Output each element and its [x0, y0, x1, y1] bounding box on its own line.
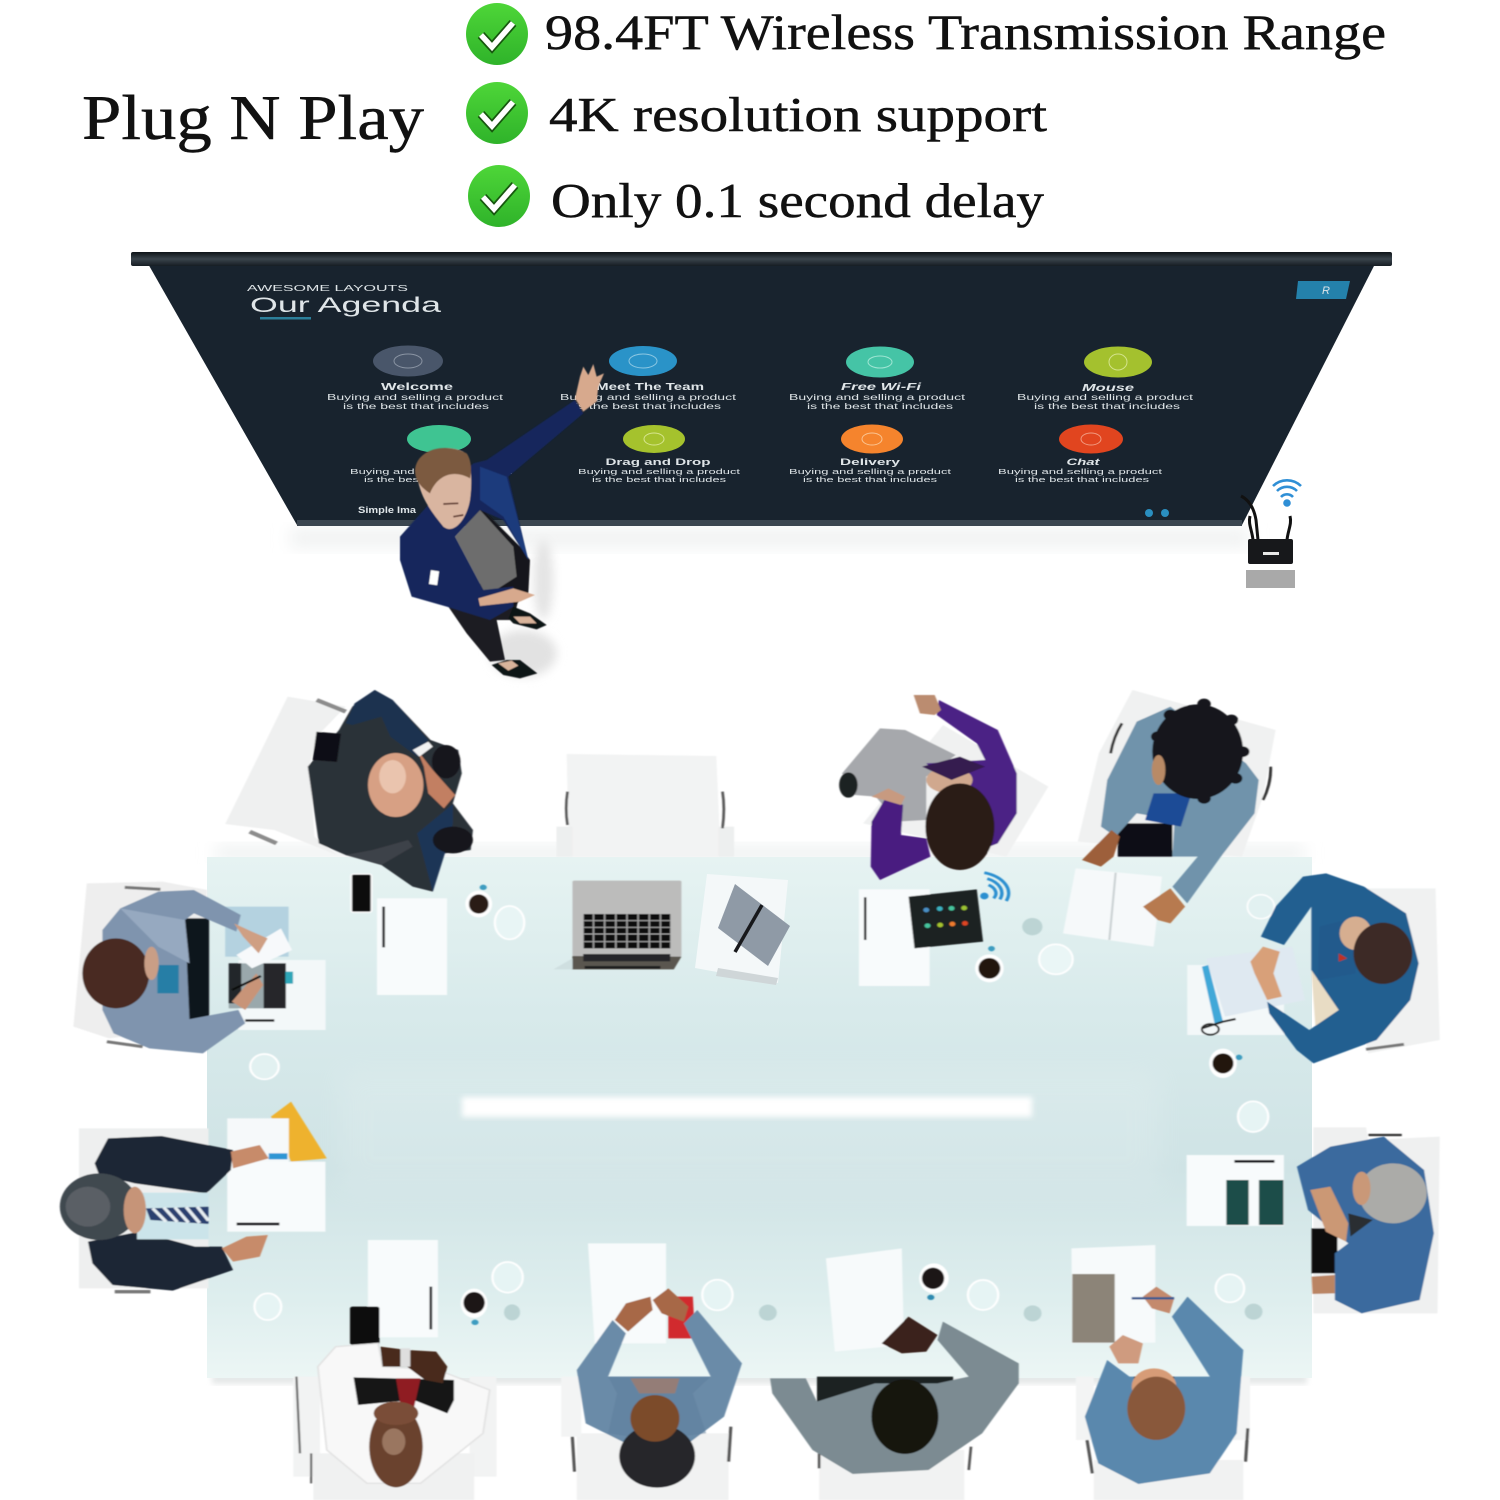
glass — [1039, 944, 1073, 974]
glass — [1238, 1101, 1268, 1132]
chair: woman in grey blazer — [561, 1377, 731, 1500]
table items and people: upper left — [73, 690, 734, 1079]
feature list — [466, 3, 1386, 228]
yellow folder — [271, 1102, 327, 1162]
agenda row 1: is the best that includes — [1034, 402, 1180, 411]
agenda row 2: Drag and Drop — [606, 457, 711, 468]
woman left: person — [73, 882, 268, 1053]
laptop — [553, 881, 681, 969]
glasses — [492, 1262, 523, 1293]
agenda row 2: Chat — [1066, 457, 1101, 468]
glass — [1216, 1274, 1244, 1302]
agenda row 1: Welcome — [381, 382, 454, 393]
blue sweater man: desk papers — [1187, 947, 1305, 1035]
grey-jacket man — [770, 1317, 1019, 1474]
chair: right man — [1313, 1127, 1440, 1313]
agenda row 1: Buying and selling a product — [327, 393, 504, 402]
dark suit man — [60, 1136, 269, 1292]
agenda row 1: is the best that includes — [575, 402, 721, 411]
raised hand — [575, 364, 604, 412]
spots — [759, 1305, 777, 1321]
icon: green check 3 — [468, 165, 530, 227]
paper and pen — [368, 1240, 438, 1337]
table items and people: lower right — [759, 1101, 1440, 1500]
coffee cup — [1209, 1049, 1242, 1078]
feature: delay: Only 0.1 second delay — [551, 173, 1045, 228]
icon: wireless router — [1241, 480, 1301, 588]
clipboard with notebook — [695, 874, 790, 985]
glass — [254, 1293, 281, 1320]
blue sweater man — [1250, 873, 1419, 1063]
bald man in suit — [308, 690, 473, 892]
slide nav dots — [1145, 509, 1169, 517]
table papers under woman — [588, 1243, 666, 1343]
coffee cup — [919, 1263, 949, 1300]
navy blazer — [400, 400, 583, 620]
chair: blue sweater man — [1347, 888, 1440, 1053]
chair: bald man — [225, 697, 346, 855]
slide heading: Our Agenda — [250, 294, 442, 317]
phone — [350, 1307, 379, 1345]
feature: 4K resolution: 4K resolution support — [549, 87, 1047, 142]
panel: conference table — [207, 857, 1312, 1378]
floor shadow over table — [215, 846, 1305, 860]
phone — [351, 874, 372, 912]
chair: woman purple — [863, 725, 1048, 857]
table items and people: lower left — [60, 1102, 742, 1500]
icon: green check 1 — [466, 3, 528, 65]
right man in blue jacket — [1297, 1135, 1434, 1313]
agenda row 2: Buying and selling a product — [789, 467, 951, 476]
agenda row 2: Buying and selling a product — [350, 467, 512, 476]
papers — [227, 1118, 325, 1232]
book — [1063, 868, 1162, 947]
agenda row 1 — [327, 346, 1194, 411]
legs and shoes — [448, 593, 547, 678]
title: Plug N Play: Plug N Play — [82, 83, 425, 153]
woman left: desk items — [225, 907, 326, 1030]
agenda row 1: Meet The Team — [596, 382, 704, 393]
chair: dark suit man — [79, 1128, 208, 1288]
agenda row 1: Mouse — [1082, 383, 1135, 394]
papers — [826, 1248, 904, 1352]
forearm hand — [478, 588, 535, 606]
empty chair — [556, 754, 734, 857]
agenda row 1: Buying and selling a product — [1017, 393, 1194, 402]
router wifi signal — [1273, 480, 1301, 506]
presenter — [400, 364, 604, 678]
blue jacket man — [1085, 1287, 1243, 1484]
paper and pen — [859, 889, 930, 986]
agenda row 1: Buying and selling a product — [560, 393, 737, 402]
papers with green notebooks — [1187, 1155, 1284, 1226]
head — [417, 448, 471, 529]
agenda row 2: is the best that includes — [803, 475, 938, 484]
agenda row 1: is the best that includes — [343, 402, 489, 411]
logo badge: R — [1322, 285, 1330, 297]
agenda row 2: Buying and selling a product — [578, 467, 740, 476]
slide heading: AWESOME LAYOUTS — [247, 284, 408, 293]
screen top bar — [131, 252, 1392, 266]
dark underlayer — [480, 507, 530, 607]
icon: tablet wifi signal — [982, 873, 1009, 901]
agenda row 1: Buying and selling a product — [789, 393, 966, 402]
panel: projection screen — [131, 252, 1392, 548]
feature: wireless range: 98.4FT Wireless Transmission Range — [545, 4, 1386, 60]
chair: curly hair man — [1078, 690, 1276, 857]
chair: grey-jacket man — [819, 1447, 971, 1500]
icon: green check 2 — [466, 82, 528, 144]
coffee cup — [465, 885, 492, 917]
glass — [968, 1280, 998, 1310]
paper and pen — [377, 898, 447, 995]
table items and people: upper right — [839, 690, 1440, 1078]
agenda row 2: is the best that includes — [592, 475, 727, 484]
table center light strip — [462, 1097, 1032, 1117]
glass — [250, 1054, 279, 1079]
agenda row 2: Simple Ima — [358, 505, 417, 515]
agenda row 2: Delivery — [840, 457, 901, 468]
tablet — [909, 889, 983, 948]
agenda row 1: Free Wi-Fi — [841, 382, 921, 393]
papers with notebook — [1071, 1245, 1155, 1343]
grey top — [455, 510, 517, 592]
woman in purple — [839, 695, 1017, 880]
chair: white shirt man — [293, 1377, 496, 1500]
agenda row 2: is the best that includes — [364, 475, 499, 484]
agenda row 1: is the best that includes — [807, 402, 953, 411]
agenda row 2: Buying and selling a product — [998, 467, 1162, 476]
agenda row 2: is the best that includes — [1015, 475, 1150, 484]
curly hair man — [1082, 699, 1259, 923]
screen bottom bar — [297, 520, 1242, 526]
slide heading — [247, 284, 442, 320]
agenda row 2 — [350, 424, 1162, 515]
glass — [495, 906, 524, 939]
chair: blue jacket man — [1076, 1377, 1250, 1500]
coffee cup — [975, 946, 1004, 982]
white shirt man — [318, 1343, 490, 1487]
woman in grey blazer — [577, 1288, 742, 1488]
logo badge — [1296, 281, 1350, 299]
coffee cup — [461, 1289, 488, 1325]
